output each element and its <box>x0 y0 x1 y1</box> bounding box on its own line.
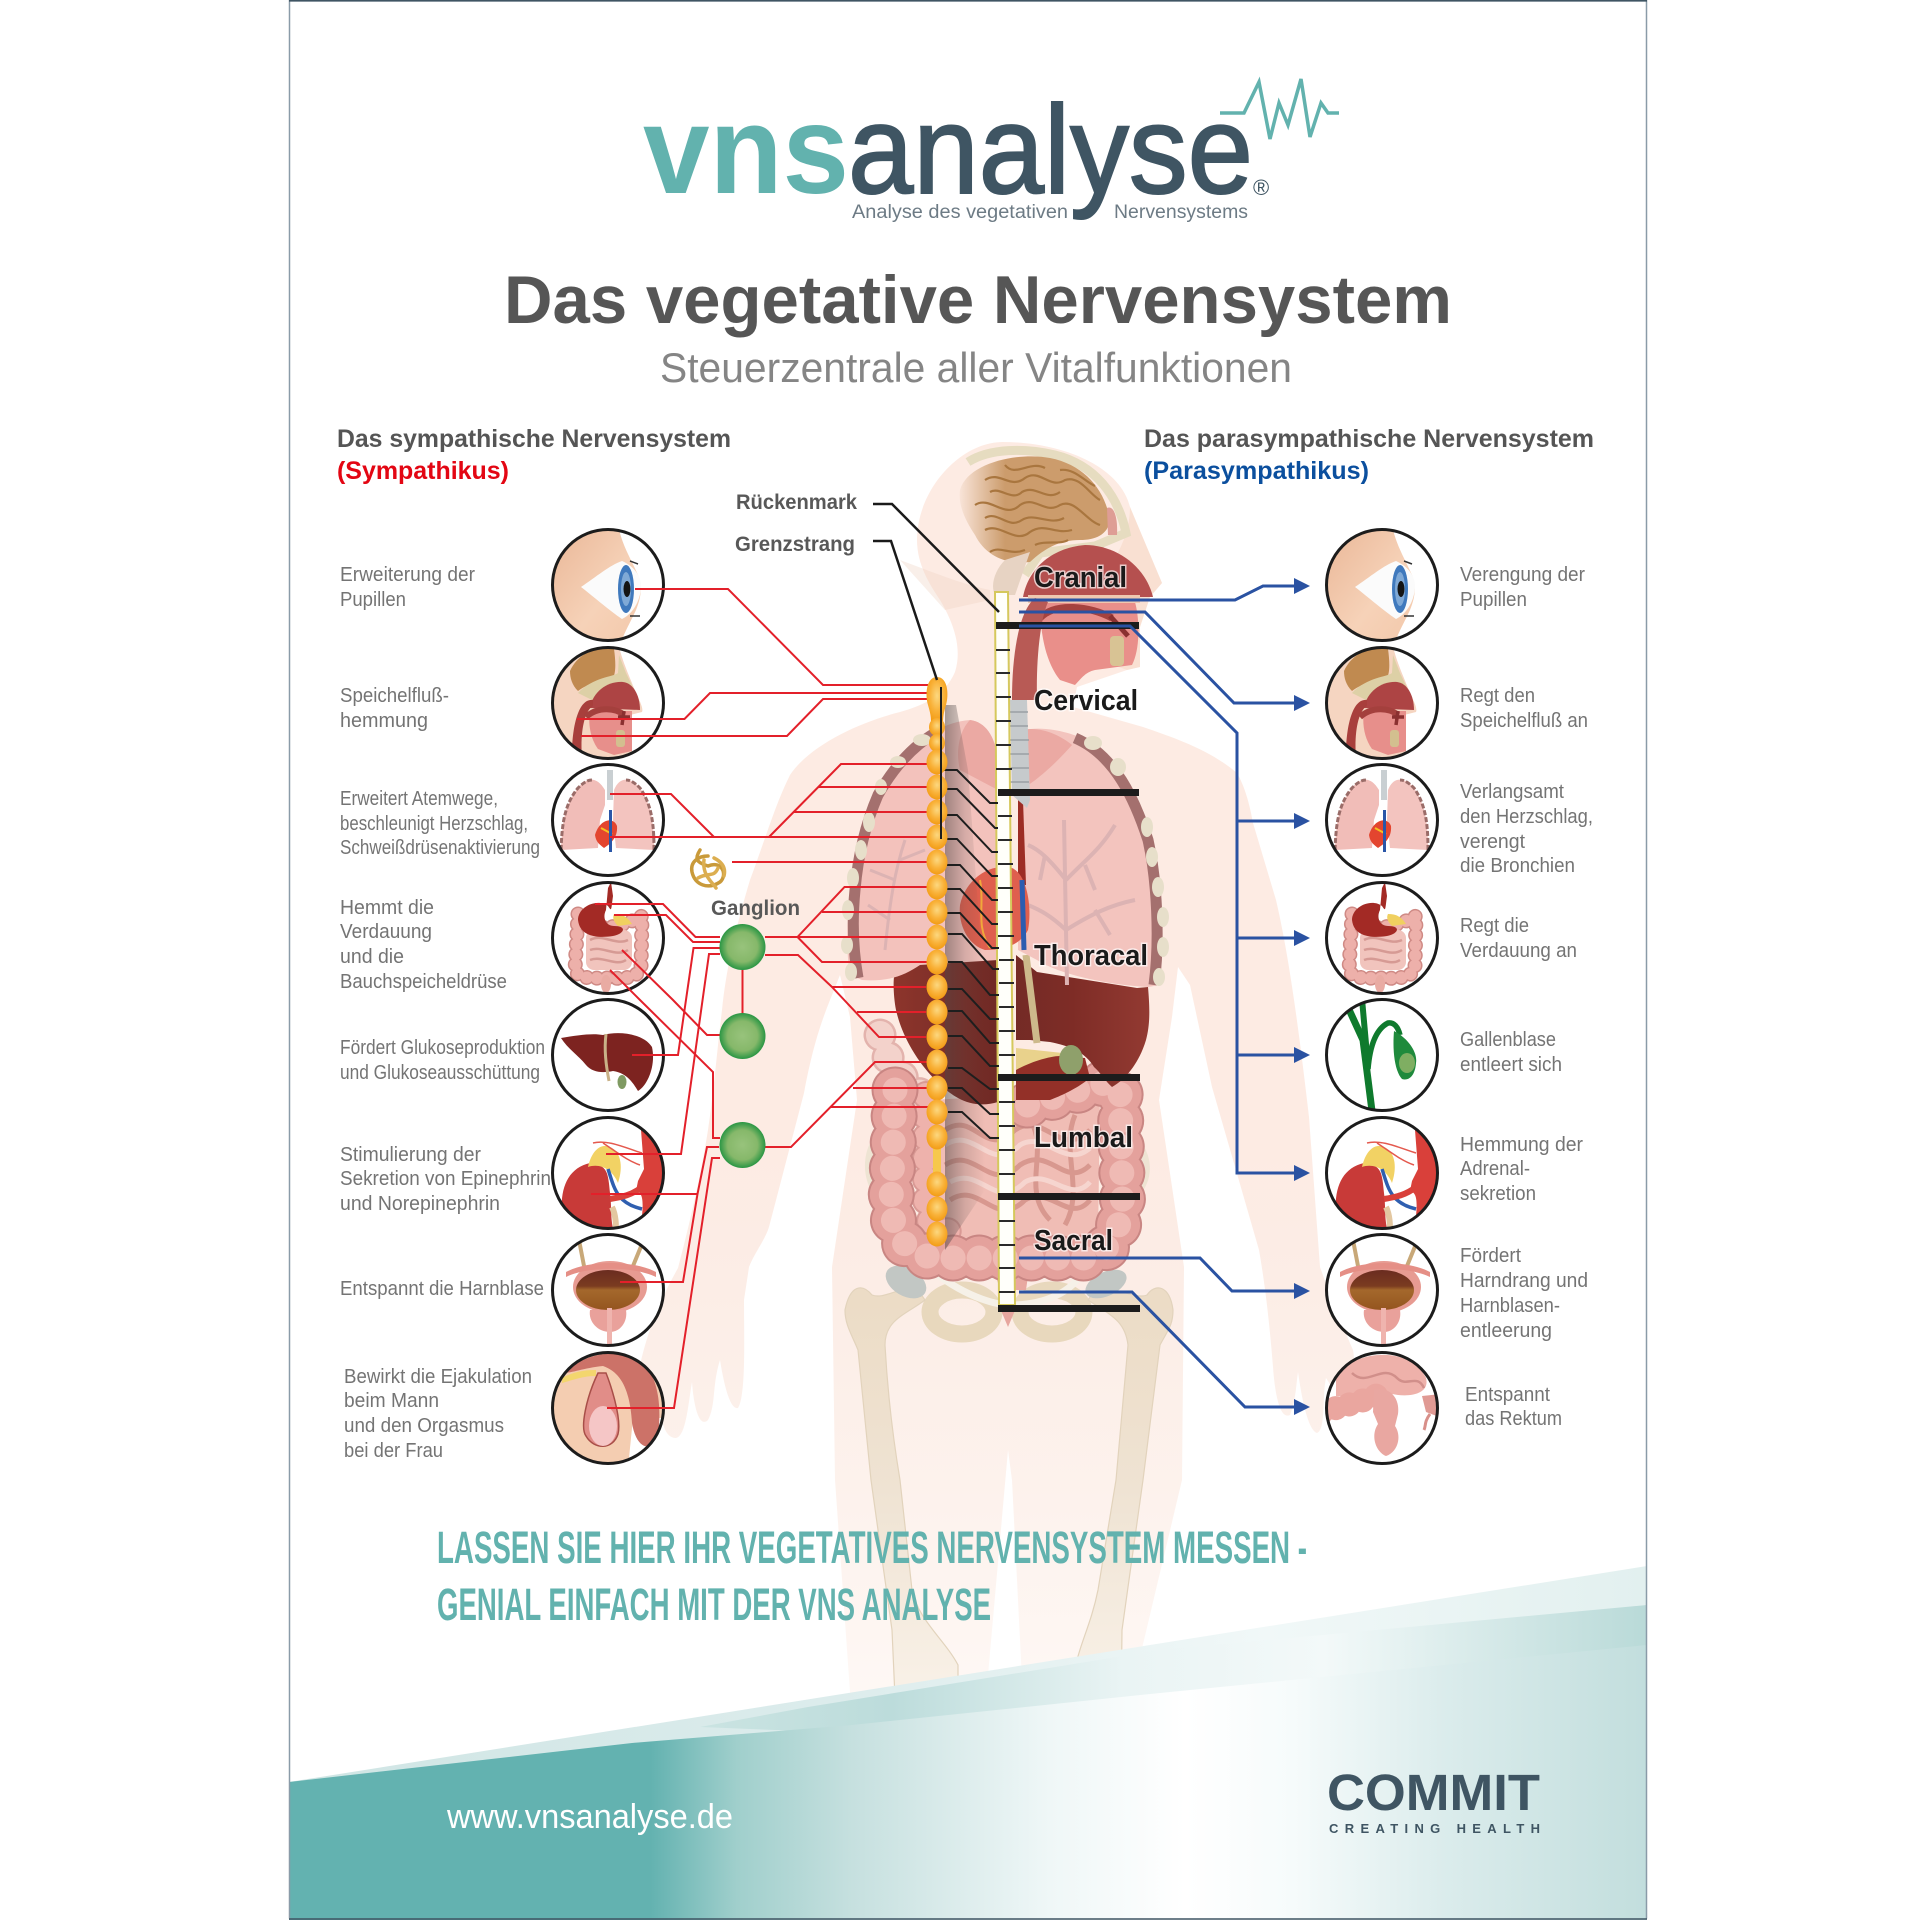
text: adrenal sympathetic <box>340 1144 551 1215</box>
heading: sympathetic system <box>337 425 731 485</box>
icon: stomach right <box>1322 878 1442 998</box>
text: rectum parasympathetic <box>1465 1384 1562 1430</box>
text: eye parasympathetic: Pupillen <box>1460 589 1527 611</box>
right organ icons (parasympathetic) <box>1322 525 1442 1468</box>
heading: sympathetic system: (Sympathikus) <box>337 457 509 485</box>
text: adrenal sympathetic: Sekretion von Epinephrin <box>340 1168 551 1190</box>
text: adrenal parasympathetic <box>1460 1134 1583 1205</box>
text: saliva sympathetic: Speichelfluß- <box>340 685 449 707</box>
text: liver sympathetic: und Glukoseausschüttung <box>340 1062 540 1084</box>
text: eye sympathetic <box>340 564 475 611</box>
text: rectum parasympathetic: Entspannt <box>1465 1384 1550 1406</box>
segment bars <box>996 622 1140 1312</box>
page background <box>289 0 1647 1920</box>
title: Das vegetative Nervensystem <box>504 262 1452 338</box>
text: digestion parasympathetic: Verdauung an <box>1460 940 1577 962</box>
text: digestion sympathetic: Verdauung <box>340 921 432 943</box>
icon: lungs and heart <box>548 760 668 880</box>
left organ icons (sympathetic) <box>548 525 668 1468</box>
heart <box>960 800 1029 950</box>
icon: rectum <box>1322 1348 1442 1468</box>
text: eye sympathetic: Erweiterung der <box>340 564 475 586</box>
head anatomy: brain, nasal cavity, throat <box>960 450 1153 808</box>
text: saliva sympathetic: hemmung <box>340 710 428 732</box>
bottom banner <box>289 1566 1647 1920</box>
left effect labels <box>340 564 551 1462</box>
text: saliva parasympathetic: Regt den <box>1460 685 1535 707</box>
right effect labels <box>1460 564 1593 1430</box>
logo: vnsanalyse <box>643 79 1339 223</box>
text: digestion sympathetic: und die <box>340 946 404 968</box>
icon: eye right <box>1322 525 1442 645</box>
icon: reproductive organ <box>548 1348 668 1468</box>
black connectors from chain to spinal cord <box>941 770 999 1138</box>
text: airways sympathetic: beschleunigt Herzschlag, <box>340 813 528 835</box>
text: adrenal sympathetic: Stimulierung der <box>340 1144 481 1166</box>
text: heart parasympathetic: Verlangsamt <box>1460 781 1564 803</box>
text: adrenal parasympathetic: sekretion <box>1460 1183 1536 1205</box>
text: adrenal parasympathetic: Hemmung der <box>1460 1134 1583 1156</box>
text: adrenal parasympathetic: Adrenal- <box>1460 1158 1530 1180</box>
parasympathetic blue nerve lines and arrows <box>1019 578 1310 1415</box>
spinal region labels: Thoracal <box>1034 940 1148 972</box>
icon: ECG pulse <box>1220 79 1339 139</box>
logo: COMMIT: CREATING HEALTH <box>1329 1821 1540 1836</box>
icon: bladder right <box>1322 1230 1442 1350</box>
lungs <box>841 720 1169 987</box>
spinal region labels: Lumbal <box>1034 1122 1133 1154</box>
page border <box>290 0 1646 1918</box>
icon: head section right <box>1322 643 1442 763</box>
text: gallbladder parasympathetic: Gallenblase <box>1460 1029 1556 1051</box>
spinal region labels: Sacral <box>1034 1225 1113 1257</box>
text: heart parasympathetic: den Herzschlag, <box>1460 806 1593 828</box>
text: airways sympathetic: Schweißdrüsenaktivierung <box>340 837 540 859</box>
text: adrenal sympathetic: und Norepinephrin <box>340 1193 500 1215</box>
icon: lungs right <box>1322 760 1442 880</box>
text: reproduction sympathetic <box>344 1366 532 1462</box>
ganglia <box>720 924 766 1168</box>
text: eye sympathetic: Pupillen <box>340 589 406 611</box>
subtitle: Steuerzentrale aller Vitalfunktionen <box>660 344 1292 391</box>
text: digestion sympathetic <box>340 897 507 993</box>
slogan <box>437 1522 1307 1630</box>
heading: sympathetic system: Das sympathische Nervensystem <box>337 425 731 453</box>
text: saliva sympathetic <box>340 685 449 732</box>
slogan: LASSEN SIE HIER IHR VEGETATIVES NERVENSYSTEM MESSEN - <box>437 1522 1307 1573</box>
logo: vnsanalyse: analyse <box>848 81 1253 220</box>
heading: parasympathetic system: Das parasympathische Nervensystem <box>1144 425 1594 453</box>
text: eye parasympathetic <box>1460 564 1585 611</box>
pointer lines: Rückenmark and Grenzstrang <box>873 504 999 680</box>
icon: head section <box>548 643 668 763</box>
text: gallbladder parasympathetic <box>1460 1029 1562 1076</box>
logo tagline: Analyse des vegetativen <box>852 202 1068 223</box>
text: bladder parasympathetic: Harnblasen- <box>1460 1295 1560 1317</box>
icon: liver <box>548 995 668 1115</box>
shading beside the sympathetic chain <box>945 705 985 1250</box>
text: bladder parasympathetic: entleerung <box>1460 1320 1552 1342</box>
text: heart parasympathetic: verengt <box>1460 831 1525 853</box>
slogan: GENIAL EINFACH MIT DER VNS ANALYSE <box>437 1579 991 1630</box>
text: reproduction sympathetic: Bewirkt die Ejakulation <box>344 1366 532 1388</box>
text: airways sympathetic: Erweitert Atemwege, <box>340 788 498 810</box>
anatomy annotations <box>711 491 857 920</box>
text: reproduction sympathetic: bei der Frau <box>344 1440 443 1462</box>
text: saliva parasympathetic: Speichelfluß an <box>1460 710 1588 732</box>
spinal region labels: Cranial <box>1034 562 1127 594</box>
text: liver sympathetic: Fördert Glukoseproduktion <box>340 1037 545 1059</box>
anatomy annotations: Rückenmark <box>736 491 857 514</box>
spinal cord with segment ticks <box>995 592 1015 1305</box>
icon: kidney and adrenal gland <box>548 1113 668 1233</box>
text: heart parasympathetic <box>1460 781 1593 877</box>
text: liver sympathetic <box>340 1037 545 1084</box>
icon: gallbladder <box>1322 995 1442 1115</box>
logo: COMMIT: COMMIT <box>1327 1764 1540 1821</box>
text: digestion sympathetic: Hemmt die <box>340 897 434 919</box>
intestines <box>880 1035 1123 1258</box>
sympathetic red nerve lines <box>577 589 928 1408</box>
text: airways sympathetic <box>340 788 540 859</box>
logo: vnsanalyse: vns <box>643 81 849 220</box>
icon: stomach and intestine <box>548 878 668 998</box>
text: saliva parasympathetic <box>1460 685 1588 732</box>
icon: eye <box>548 525 668 645</box>
text: digestion parasympathetic: Regt die <box>1460 915 1529 937</box>
spinal region labels: Cervical <box>1034 685 1138 717</box>
text: rectum parasympathetic: das Rektum <box>1465 1408 1562 1430</box>
text: eye parasympathetic: Verengung der <box>1460 564 1585 586</box>
text: bladder parasympathetic: Harndrang und <box>1460 1270 1588 1292</box>
human body silhouette <box>634 442 1354 1720</box>
text: reproduction sympathetic: beim Mann <box>344 1390 439 1412</box>
anatomy annotations: Ganglion <box>711 897 800 920</box>
text: bladder parasympathetic <box>1460 1245 1588 1342</box>
text: bladder sympathetic: Entspannt die Harnblase <box>340 1278 544 1300</box>
logo tagline <box>852 202 1248 223</box>
anatomy annotations: Grenzstrang <box>735 533 855 556</box>
liver and gallbladder <box>894 955 1149 1104</box>
heading: parasympathetic system <box>1144 425 1594 485</box>
website url: www.vnsanalyse.de <box>446 1798 733 1836</box>
icon: bladder <box>548 1230 668 1350</box>
text: heart parasympathetic: die Bronchien <box>1460 855 1575 877</box>
icon: kidney right <box>1322 1113 1442 1233</box>
text: bladder parasympathetic: Fördert <box>1460 1245 1521 1267</box>
logo tagline: Nervensystems <box>1114 202 1248 223</box>
pelvis and femur bones <box>845 1135 1173 1720</box>
spinal region labels <box>1034 562 1148 1257</box>
text: digestion parasympathetic <box>1460 915 1577 962</box>
text: gallbladder parasympathetic: entleert sich <box>1460 1054 1562 1076</box>
sympathetic chain (Grenzstrang) beads <box>926 677 948 1246</box>
text: digestion sympathetic: Bauchspeicheldrüse <box>340 971 507 993</box>
heading: parasympathetic system: (Parasympathikus) <box>1144 457 1369 485</box>
icon: yellow nerve tangle <box>692 850 725 888</box>
text: reproduction sympathetic: und den Orgasmus <box>344 1415 504 1437</box>
logo: vnsanalyse: ® <box>1253 175 1269 200</box>
